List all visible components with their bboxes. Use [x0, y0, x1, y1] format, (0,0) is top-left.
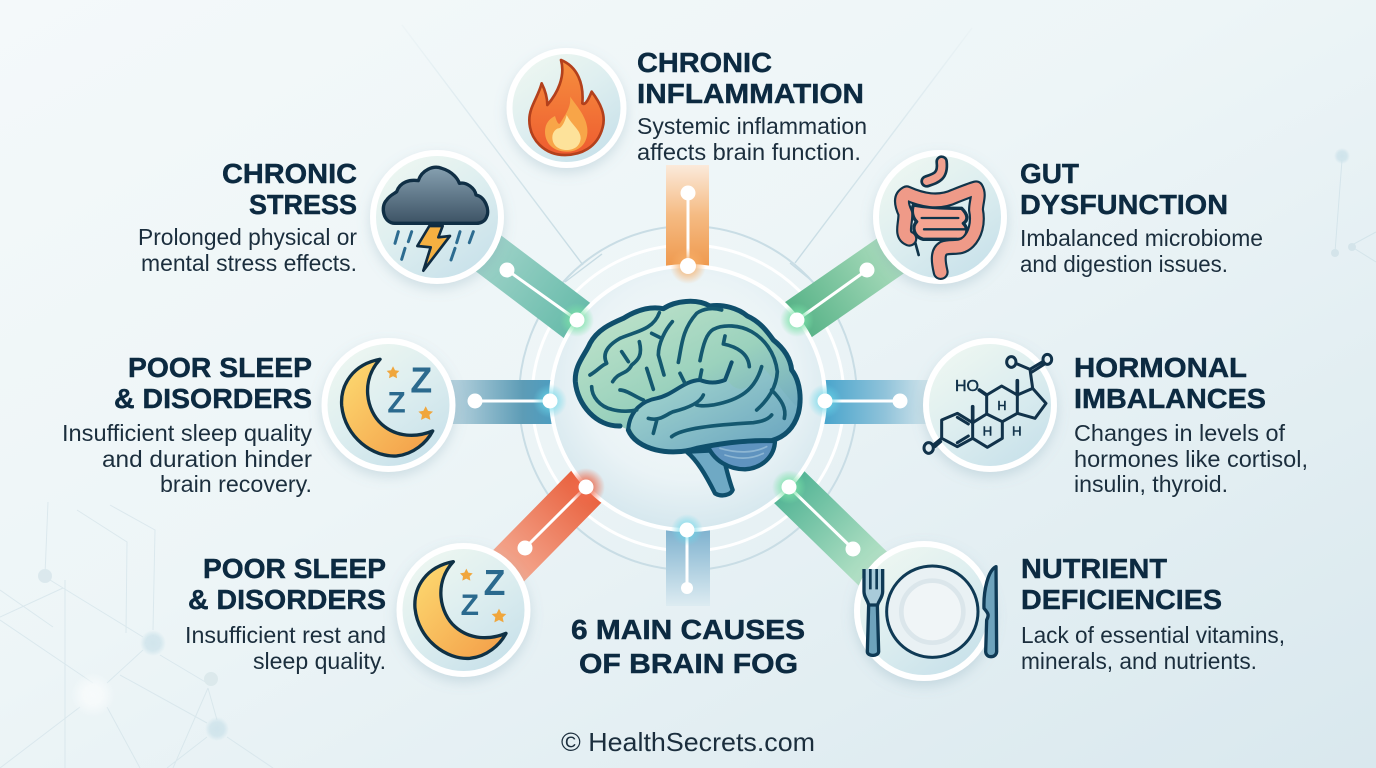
- connector: hormonal imbalances: [823, 380, 928, 424]
- heading: poor sleep and disorders, left: & DISORDERS: [114, 383, 312, 414]
- heading: poor sleep and disorders, left: [114, 352, 312, 414]
- connector: poor sleep and disorders, lower: [475, 483, 590, 600]
- text: poor sleep and disorders, left: brain recovery.: [160, 471, 312, 497]
- text: chronic stress: [138, 224, 357, 276]
- text: gut dysfunction: [1020, 225, 1263, 277]
- heading: nutrient deficiencies: [1021, 553, 1222, 615]
- text: poor sleep and disorders, lower: sleep quality.: [253, 648, 386, 674]
- heading: poor sleep and disorders, lower: & DISORDERS: [188, 584, 386, 615]
- text: nutrient deficiencies: minerals, and nutrients.: [1021, 648, 1257, 674]
- text: poor sleep and disorders, left: Insufficient sleep quality: [62, 420, 313, 446]
- connector: chronic stress: [455, 228, 579, 322]
- heading: hormonal imbalances: HORMONAL: [1074, 352, 1247, 383]
- icon: cortisol molecule: [924, 341, 1054, 469]
- background network: right side: [1331, 148, 1376, 262]
- footer credit: © HealthSecrets.com: [561, 727, 815, 757]
- hub outer rings: [519, 226, 857, 570]
- icon: cortisol molecule: H: [983, 423, 992, 438]
- icon: crescent moon with Z: Z: [484, 563, 505, 603]
- text: chronic inflammation: affects brain function.: [637, 139, 861, 165]
- icon: intestines: [876, 153, 1004, 281]
- text: chronic inflammation: [637, 113, 867, 165]
- title: 6 MAIN CAUSES: [571, 614, 805, 645]
- icon: cortisol molecule: H: [997, 399, 1006, 413]
- text: poor sleep and disorders, left: [62, 420, 313, 497]
- connector: title stem: [666, 528, 710, 606]
- icon: crescent moon with Z: [400, 546, 528, 674]
- text: gut dysfunction: Imbalanced microbiome: [1020, 225, 1263, 251]
- panel: gut dysfunction: [876, 153, 1263, 281]
- heading: chronic stress: [222, 158, 357, 220]
- heading: poor sleep and disorders, lower: POOR SLEEP: [203, 553, 386, 584]
- icon: plate with fork and knife: [857, 544, 997, 678]
- heading: nutrient deficiencies: NUTRIENT: [1021, 553, 1167, 584]
- connector: nutrient deficiencies: [785, 483, 905, 600]
- text: nutrient deficiencies: [1021, 622, 1285, 674]
- panel: chronic inflammation: [510, 47, 867, 165]
- text: gut dysfunction: and digestion issues.: [1020, 251, 1228, 277]
- icon: crescent moon with Z: [324, 341, 452, 469]
- heading: chronic stress: STRESS: [249, 189, 357, 220]
- text: poor sleep and disorders, lower: [185, 622, 386, 674]
- heading: nutrient deficiencies: DEFICIENCIES: [1021, 584, 1222, 615]
- icon: cortisol molecule: HO: [955, 378, 979, 395]
- icon: cortisol molecule: H: [1012, 423, 1022, 438]
- heading: gut dysfunction: [1020, 158, 1228, 220]
- heading: poor sleep and disorders, lower: [188, 553, 386, 615]
- text: hormonal imbalances: [1074, 420, 1308, 497]
- text: hormonal imbalances: insulin, thyroid.: [1074, 471, 1228, 497]
- title: [571, 614, 805, 679]
- icon: crescent moon with Z: Z: [387, 387, 406, 420]
- icon: storm cloud: [373, 153, 501, 281]
- heading: poor sleep and disorders, left: POOR SLEEP: [128, 352, 312, 383]
- background network: bottom left: [0, 502, 273, 768]
- text: nutrient deficiencies: Lack of essential vitamins,: [1021, 622, 1285, 648]
- panel: chronic stress: [138, 153, 501, 281]
- background rays from the hub: [402, 25, 972, 282]
- hub glow nodes: [533, 248, 842, 546]
- text: chronic inflammation: Systemic inflammation: [637, 113, 867, 139]
- heading: chronic stress: CHRONIC: [222, 158, 357, 189]
- panel: poor sleep and disorders, lower: [185, 546, 528, 674]
- panel: nutrient deficiencies: [857, 544, 1285, 678]
- icon: brain: [575, 301, 800, 495]
- text: chronic stress: mental stress effects.: [141, 250, 357, 276]
- heading: chronic inflammation: [637, 47, 864, 109]
- text: chronic stress: Prolonged physical or: [138, 224, 357, 250]
- heading: hormonal imbalances: [1074, 352, 1266, 414]
- connector: chronic inflammation: [666, 165, 709, 266]
- panel: hormonal imbalances: [924, 341, 1308, 497]
- heading: hormonal imbalances: IMBALANCES: [1074, 383, 1266, 414]
- icon: crescent moon with Z: Z: [461, 589, 479, 622]
- central hub: [533, 248, 842, 546]
- connector: gut dysfunction: [795, 232, 925, 322]
- heading: chronic inflammation: CHRONIC: [637, 47, 772, 78]
- text: hormonal imbalances: Changes in levels of: [1074, 420, 1286, 446]
- title: OF BRAIN FOG: [579, 648, 798, 679]
- text: hormonal imbalances: hormones like cortisol,: [1074, 446, 1308, 472]
- heading: chronic inflammation: INFLAMMATION: [637, 78, 864, 109]
- icon: crescent moon with Z: Z: [410, 361, 432, 401]
- text: poor sleep and disorders, lower: Insufficient rest and: [185, 622, 386, 648]
- heading: gut dysfunction: DYSFUNCTION: [1020, 189, 1228, 220]
- icon: flame: [510, 51, 624, 165]
- panel: poor sleep and disorders, left: [62, 341, 452, 497]
- heading: gut dysfunction: GUT: [1020, 158, 1079, 189]
- text: poor sleep and disorders, left: and duration hinder: [102, 446, 312, 472]
- connector: poor sleep and disorders, left: [450, 380, 552, 424]
